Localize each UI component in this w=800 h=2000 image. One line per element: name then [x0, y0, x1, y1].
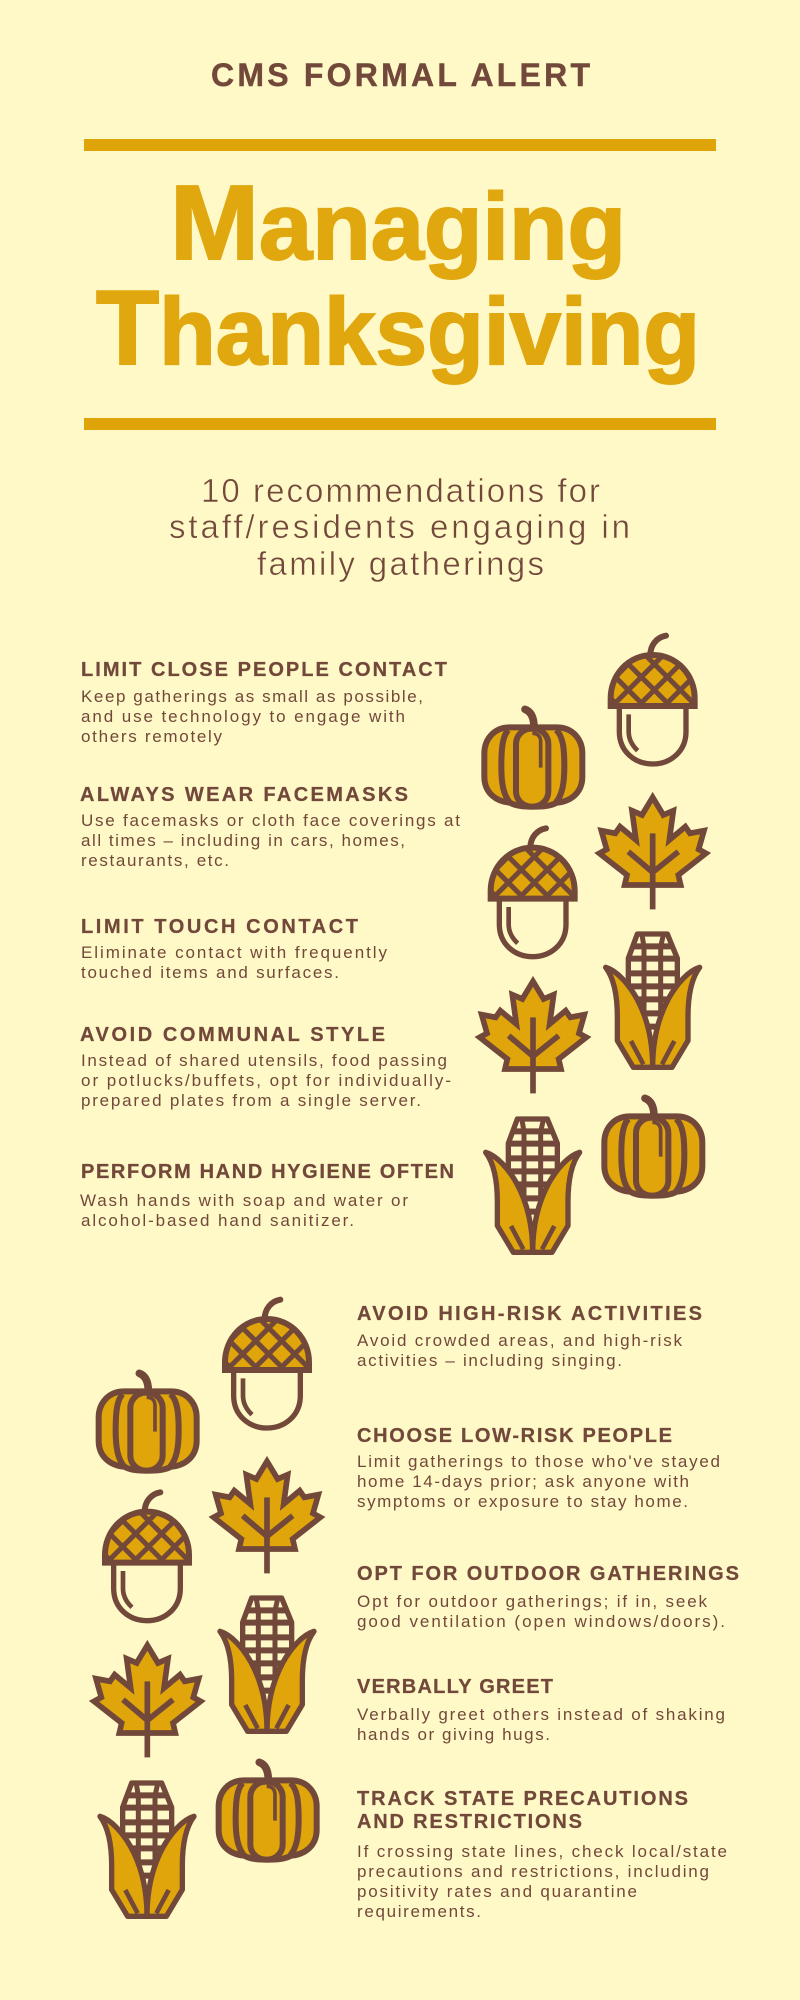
recommendation: verbally greet: hands or giving hugs.	[357, 1725, 550, 1744]
recommendation: track state precautions and restrictions: positivity rates and quarantine	[357, 1882, 637, 1901]
recommendation: limit touch contact: LIMIT TOUCH CONTACT	[81, 916, 358, 938]
recommendation: avoid high-risk activities: Avoid crowded areas, and high-risk	[357, 1331, 682, 1350]
recommendation: always wear facemasks: restaurants, etc.	[81, 851, 229, 870]
recommendation: limit close people contact	[81, 659, 447, 746]
recommendation: perform hand hygiene often: Wash hands with soap and water or	[80, 1191, 408, 1210]
recommendation: opt for outdoor gatherings: good ventilation (open windows/doors).	[357, 1612, 725, 1631]
subtitle: family gatherings	[257, 545, 544, 582]
title: Thanksgiving	[96, 269, 700, 387]
recommendation: limit close people contact: LIMIT CLOSE PEOPLE CONTACT	[81, 659, 447, 681]
recommendation: opt for outdoor gatherings	[357, 1563, 739, 1631]
subtitle	[169, 472, 630, 582]
recommendation: limit close people contact: others remotely	[81, 727, 222, 746]
recommendation: verbally greet: VERBALLY GREET	[357, 1676, 553, 1698]
recommendation: choose low-risk people: home 14-days prior; ask anyone with	[357, 1472, 689, 1491]
recommendation: choose low-risk people: CHOOSE LOW-RISK PEOPLE	[357, 1425, 672, 1447]
icon cluster: top autumn icons	[420, 627, 769, 1252]
recommendation: always wear facemasks: ALWAYS WEAR FACEMASKS	[80, 784, 408, 806]
eyebrow heading: CMS FORMAL ALERT	[211, 57, 590, 93]
recommendation: perform hand hygiene often	[80, 1161, 454, 1230]
panel: recommendations 1-5	[80, 659, 460, 1230]
icon: pumpkin	[99, 1373, 197, 1471]
title: Managing	[170, 164, 626, 282]
recommendation: avoid high-risk activities: activities – including singing.	[357, 1351, 622, 1370]
recommendation: avoid communal style: or potlucks/buffets, opt for individually-	[81, 1071, 451, 1090]
icon: pumpkin	[604, 1098, 702, 1196]
icon: corn	[100, 1783, 194, 1916]
recommendation: track state precautions and restrictions: requirements.	[357, 1902, 481, 1921]
icon cluster: bottom autumn icons	[34, 1291, 383, 1916]
recommendation: track state precautions and restrictions: AND RESTRICTIONS	[357, 1811, 582, 1833]
recommendation: perform hand hygiene often: alcohol-based hand sanitizer.	[81, 1211, 354, 1230]
icon: maple leaf	[480, 981, 586, 1093]
recommendation: avoid communal style: prepared plates from a single server.	[81, 1091, 421, 1110]
recommendation: avoid communal style: AVOID COMMUNAL STYLE	[80, 1024, 385, 1046]
recommendation: limit touch contact: Eliminate contact with frequently	[81, 943, 388, 962]
recommendation: avoid high-risk activities	[357, 1303, 702, 1370]
recommendation: choose low-risk people: symptoms or exposure to stay home.	[357, 1492, 688, 1511]
bottom title rule	[84, 418, 716, 430]
subtitle: 10 recommendations for	[201, 472, 600, 509]
recommendation: always wear facemasks: Use facemasks or cloth face coverings at	[81, 811, 460, 830]
recommendation: avoid communal style	[80, 1024, 451, 1110]
recommendation: limit close people contact: Keep gatherings as small as possible,	[81, 687, 423, 706]
recommendation: limit touch contact: touched items and surfaces.	[81, 963, 339, 982]
recommendation: always wear facemasks	[80, 784, 460, 870]
icon: corn	[220, 1598, 314, 1731]
recommendation: opt for outdoor gatherings: OPT FOR OUTDOOR GATHERINGS	[357, 1563, 739, 1585]
recommendation: track state precautions and restrictions	[357, 1788, 727, 1921]
panel: recommendations 6-10	[357, 1303, 739, 1921]
icon: maple leaf	[599, 797, 706, 909]
recommendation: verbally greet	[357, 1676, 725, 1744]
icon: maple leaf	[94, 1645, 201, 1757]
icon: acorn	[154, 1291, 383, 1428]
recommendation: track state precautions and restrictions: If crossing state lines, check local/state	[357, 1842, 727, 1861]
icon: corn	[486, 1119, 580, 1252]
recommendation: verbally greet: Verbally greet others instead of shaking	[357, 1705, 725, 1724]
recommendation: choose low-risk people	[357, 1425, 720, 1511]
recommendation: opt for outdoor gatherings: Opt for outdoor gatherings; if in, seek	[357, 1592, 708, 1611]
recommendation: limit touch contact	[81, 916, 388, 982]
icon: maple leaf	[214, 1461, 320, 1573]
recommendation: choose low-risk people: Limit gatherings to those who've stayed	[357, 1452, 720, 1471]
recommendation: perform hand hygiene often: PERFORM HAND HYGIENE OFTEN	[81, 1161, 454, 1183]
icon: pumpkin	[484, 709, 582, 807]
recommendation: limit close people contact: and use technology to engage with	[81, 707, 405, 726]
recommendation: avoid communal style: Instead of shared utensils, food passing	[81, 1051, 447, 1070]
subtitle: staff/residents engaging in	[169, 508, 630, 545]
icon: corn	[606, 934, 700, 1067]
icon: acorn	[34, 1484, 263, 1621]
icon: pumpkin	[219, 1762, 317, 1860]
recommendation: track state precautions and restrictions: TRACK STATE PRECAUTIONS	[357, 1788, 688, 1810]
recommendation: avoid high-risk activities: AVOID HIGH-RISK ACTIVITIES	[357, 1303, 702, 1325]
icon: acorn	[540, 627, 769, 764]
top title rule	[84, 139, 716, 151]
title	[96, 164, 700, 387]
recommendation: always wear facemasks: all times – including in cars, homes,	[81, 831, 405, 850]
icon: acorn	[420, 820, 649, 957]
recommendation: track state precautions and restrictions: precautions and restrictions, including	[357, 1862, 709, 1881]
